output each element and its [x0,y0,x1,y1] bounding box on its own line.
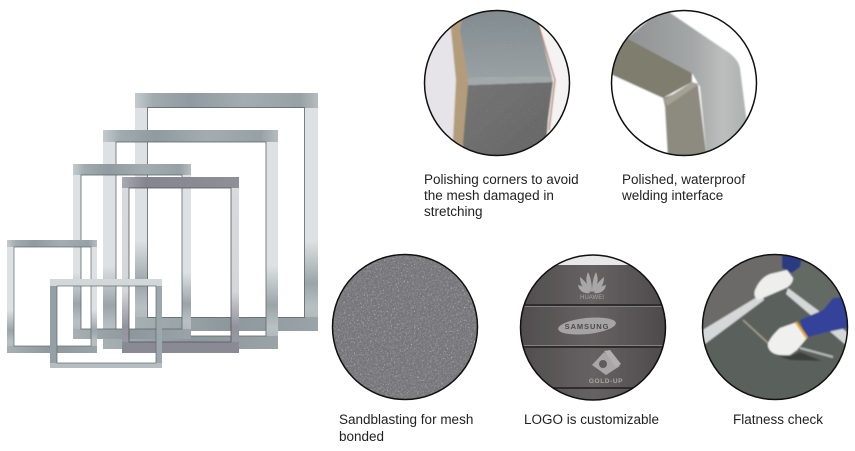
frame 3 [73,164,191,339]
sleeve lower [800,296,851,338]
logo: gold-up mark [592,350,621,375]
caption: LOGO is customizable [524,412,659,427]
caption: Polished, waterproof [622,172,745,187]
frame 2 [103,130,278,349]
logo text: samsung: SAMSUNG [565,322,609,331]
photo: sandblasted surface [331,253,479,401]
caption: stretching [424,204,483,219]
caption: welding interface [621,188,723,203]
caption: Flatness check [733,412,823,427]
logo: huawei fan [578,272,606,293]
frames group photo [7,93,318,368]
caption: Sandblasting for mesh [339,412,473,427]
logo: samsung ellipse [558,318,616,334]
caption: bonded [339,429,384,444]
photo: welded corner [610,10,758,156]
frame 1 largest [135,93,318,331]
glove lower [768,322,807,355]
sleeve upper [782,256,802,274]
photo: hands checking frame flatness [699,250,853,404]
logo text: gold-up: GOLD-UP [589,378,623,385]
panel: logo customization [517,252,669,427]
caption: the mesh damaged in [424,188,554,203]
frame 6 front [50,279,162,368]
panel: sandblasting [331,253,479,444]
photo: engraved logos [517,252,669,404]
shadow under hand [773,352,822,361]
panel: polishing corners [420,4,579,219]
glove upper [754,270,793,300]
feeler gauge [743,320,768,343]
panel: flatness check [699,250,853,427]
frame 4 purple tint [122,177,239,353]
caption: Polishing corners to avoid [424,172,579,187]
logo text: huawei: HUAWEI [580,295,604,301]
photo: polished corner [424,10,570,156]
panel: welding interface [606,6,762,203]
frame 5 [7,240,97,353]
